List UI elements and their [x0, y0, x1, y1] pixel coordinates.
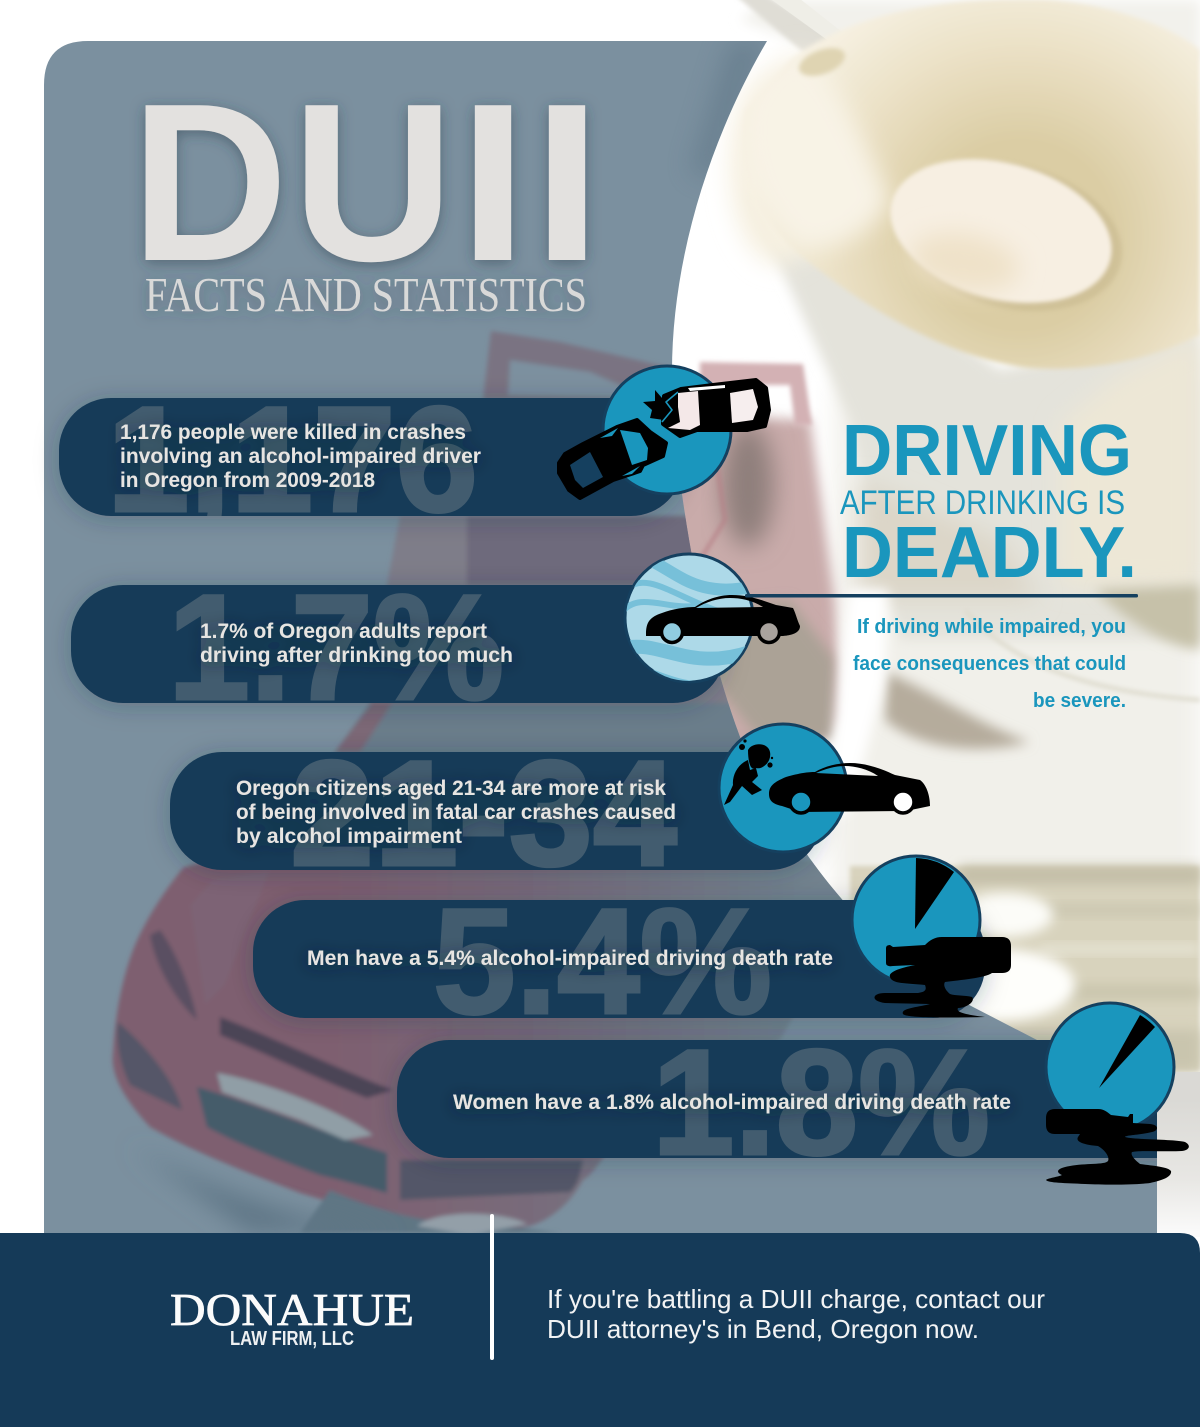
call to action: [547, 1284, 1045, 1344]
icon: drunk person and car: [719, 724, 930, 852]
panel: 1,176 stat: [50, 392, 688, 528]
call to action: DUII attorney's in Bend, Oregon now.: [547, 1314, 979, 1344]
stat text: involving an alcohol-impaired driver: [120, 444, 482, 468]
pill: [59, 398, 683, 516]
heading: driving after drinking is deadly: DRIVING: [842, 411, 1132, 491]
panel: 5.4% stat: [253, 877, 985, 1045]
heading: DUII: D: [131, 56, 288, 308]
panel: 21-34 stat: [170, 729, 822, 897]
heading: driving after drinking is deadly: DEADLY.: [842, 513, 1137, 593]
stat text: [120, 420, 482, 492]
heading: DUII: I: [532, 56, 602, 308]
logo: Donahue Law Firm: LAW FIRM, LLC: [230, 1328, 354, 1350]
heading: DUII: [131, 56, 602, 308]
heading: driving after drinking is deadly: AFTER DRINKING IS: [840, 484, 1125, 522]
ghost number: 1.8%: [652, 1018, 990, 1186]
stat text: of being involved in fatal car crashes caused: [236, 800, 676, 824]
photo: faded red car outside the panel: [672, 362, 888, 825]
icon: 5.4% pie and spilled bottle: [852, 856, 1011, 1018]
spilled bottle: [1046, 1109, 1189, 1185]
heading: DUII: U: [292, 56, 454, 308]
call to action: If you're battling a DUII charge, contact our: [547, 1284, 1045, 1314]
panel: 1.8% stat: [390, 1031, 1157, 1170]
pill: [253, 900, 985, 1018]
stat text: by alcohol impairment: [236, 824, 462, 848]
stat text: driving after drinking too much: [200, 643, 513, 667]
panel: slate background with wrecked car: [44, 41, 1157, 1235]
ghost number: 21-34: [290, 729, 677, 897]
text block: consequences: If driving while impaired, you: [857, 615, 1126, 638]
stat text: 1.7% of Oregon adults report: [200, 619, 487, 643]
pill: [71, 585, 725, 703]
subheading: facts and statistics: FACTS AND STATISTICS: [145, 267, 587, 322]
divider rule: [745, 594, 1138, 598]
heading: DUII: I: [458, 56, 528, 308]
icon: 1.8% pie and spilled bottle: [1046, 1003, 1189, 1185]
text block: consequences: [853, 615, 1126, 712]
icon: crash between two cars: [559, 366, 769, 498]
logo: Donahue Law Firm: DONAHUE: [170, 1284, 414, 1335]
stat text: Men have a 5.4% alcohol-impaired driving death rate: [307, 946, 833, 970]
stat text: [200, 619, 513, 667]
pie: [1046, 1003, 1174, 1131]
text block: consequences: face consequences that could: [853, 652, 1126, 675]
pie: [852, 856, 980, 984]
pill: [170, 752, 822, 870]
stat text: Women have a 1.8% alcohol-impaired driving death rate: [453, 1090, 1011, 1114]
stat text: Oregon citizens aged 21-34 are more at risk: [236, 776, 666, 800]
spilled bottle: [874, 937, 1011, 1018]
stat text: [236, 776, 676, 848]
stat text: 1,176 people were killed in crashes: [120, 420, 466, 444]
ghost number: 1,176: [107, 375, 478, 543]
heading: driving after drinking is deadly: [840, 411, 1137, 593]
pill: [397, 1040, 1200, 1158]
text block: consequences: be severe.: [1033, 689, 1126, 712]
footer band: [0, 1233, 1200, 1427]
ghost number: 1.7%: [168, 563, 504, 731]
icon: waves and car: [622, 554, 800, 685]
photo: martini glass with olive: [730, 0, 1200, 1237]
ghost number: 5.4%: [433, 877, 772, 1045]
stat text: in Oregon from 2009-2018: [120, 468, 375, 492]
panel: 1.7% stat: [71, 563, 725, 731]
title: [131, 56, 602, 322]
footer divider: [490, 1214, 494, 1360]
